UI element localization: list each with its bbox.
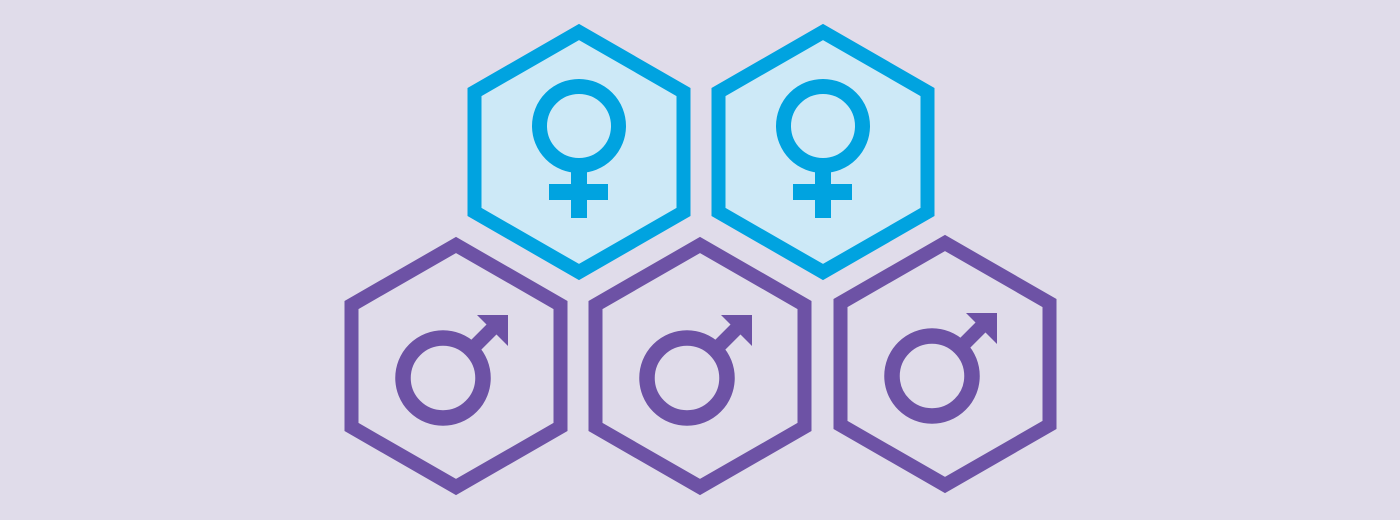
hexagon: female 1 [474,32,684,272]
hexagon: male 1 [352,245,560,487]
hexagon: male 3 [840,243,1050,485]
hexagon: male 2 [596,245,804,487]
hexagon: female 2 [718,32,928,272]
